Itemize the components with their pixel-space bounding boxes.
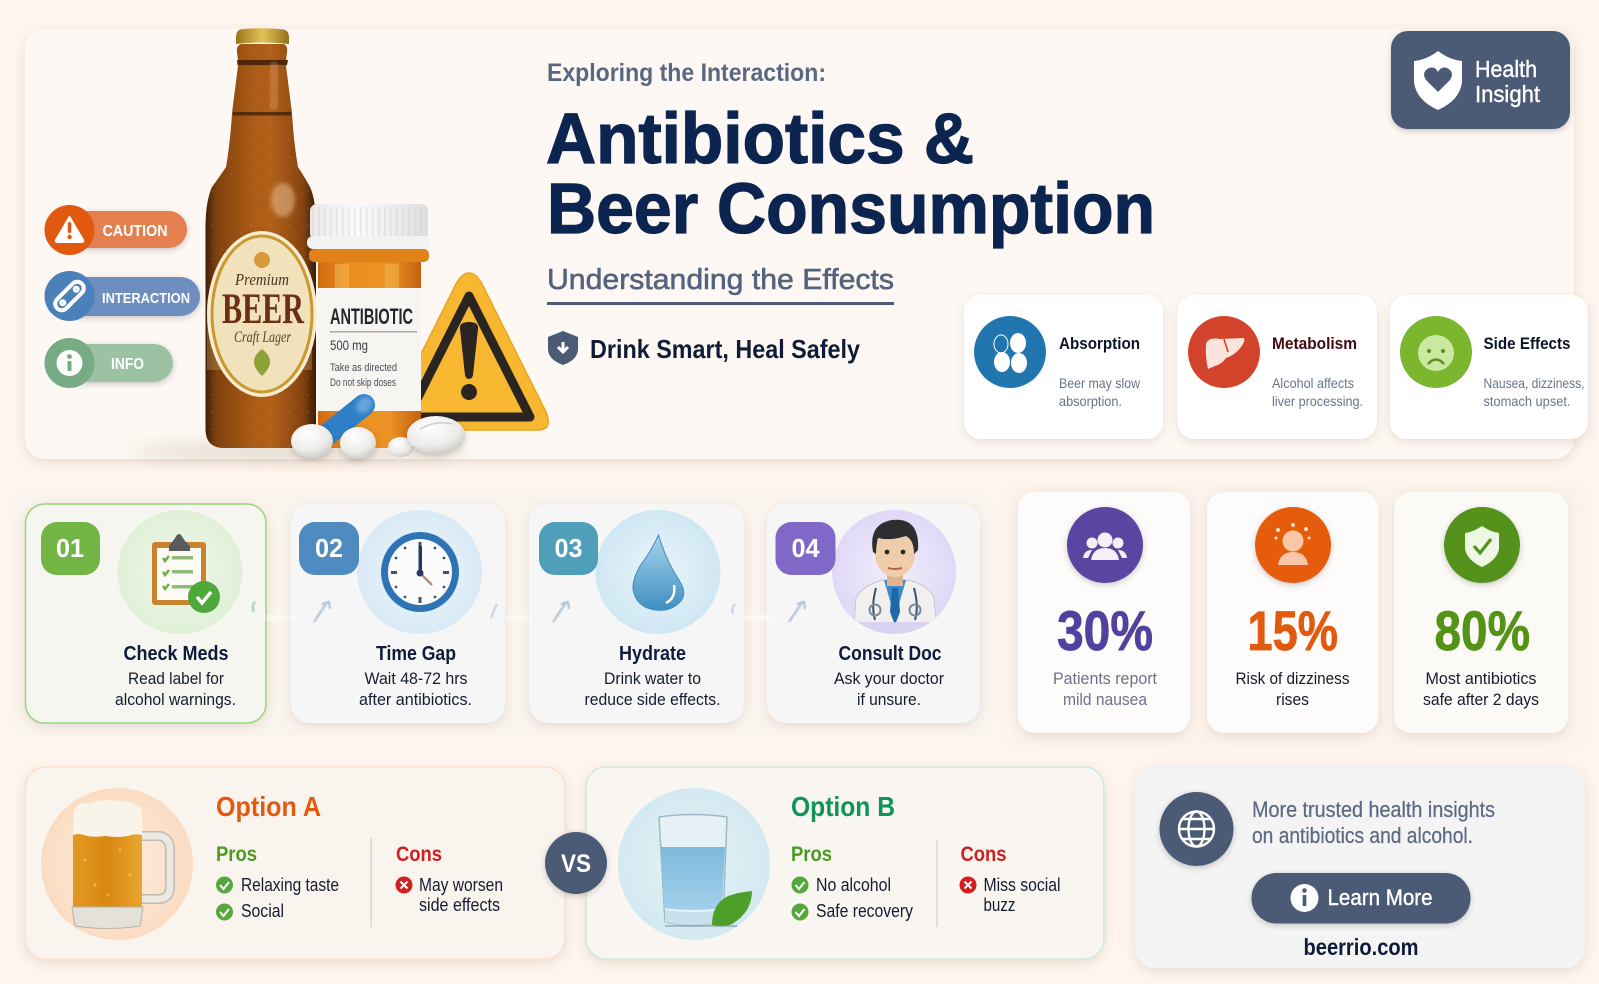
cons: Miss social <box>984 875 1060 895</box>
stat: 80%: Most antibiotics <box>1426 669 1536 688</box>
tag: interaction: INTERACTION <box>102 290 190 307</box>
icon: globe <box>1160 792 1234 866</box>
step number <box>776 522 836 575</box>
antibiotic bottle: Take as directed <box>330 362 397 374</box>
stat: 30%: 30% <box>1057 599 1153 662</box>
pros <box>791 843 913 921</box>
step 4: consult doc: if unsure. <box>857 690 921 709</box>
antibiotic bottle: Do not skip doses <box>330 377 396 389</box>
title <box>546 100 1155 249</box>
tag: info <box>44 338 173 388</box>
stat: 80% <box>1394 492 1568 733</box>
step 1: check meds: alcohol warnings. <box>115 690 236 709</box>
cons: side effects <box>419 895 500 915</box>
button: learn more: Learn More <box>1328 885 1432 910</box>
card: metabolism <box>1178 295 1377 439</box>
panel: option b: Option B <box>791 791 895 822</box>
icon: water glass <box>659 814 752 927</box>
badge: health insight: Insight <box>1475 81 1541 107</box>
panel: stats <box>1004 482 1590 750</box>
beer bottle: Premium <box>234 270 289 289</box>
step 2: time gap: after antibiotics. <box>359 690 472 709</box>
heading: understanding the effects: Understanding the Effects <box>547 264 894 296</box>
card: absorption: Absorption <box>1059 334 1140 353</box>
stat: 15%: 15% <box>1248 599 1338 662</box>
cons: Cons <box>396 843 442 866</box>
antibiotic bottle <box>307 204 431 448</box>
beer bottle: BEER <box>222 286 305 333</box>
step 1: check meds: Check Meds <box>124 643 228 665</box>
step 3: hydrate: Drink water to <box>604 669 701 688</box>
panel: option a <box>26 767 565 959</box>
card: side effects: stomach upset. <box>1484 393 1570 409</box>
panel: steps <box>11 492 994 737</box>
card: absorption: Beer may slow <box>1059 375 1141 391</box>
tag: caution <box>44 205 187 255</box>
card: metabolism: Metabolism <box>1272 334 1357 353</box>
cons <box>396 843 503 915</box>
panel: option b <box>586 767 1104 959</box>
step number: 03 <box>554 533 582 563</box>
step 1: check meds <box>26 504 266 723</box>
badge: health insight <box>1391 31 1570 129</box>
cons: buzz <box>984 895 1016 915</box>
step 2: time gap: Time Gap <box>376 643 456 665</box>
step 1: check meds: Read label for <box>128 669 224 688</box>
stat: 30%: mild nausea <box>1063 690 1147 709</box>
stat: 15%: Risk of dizziness <box>1236 669 1350 688</box>
stat: 30% <box>1018 492 1190 733</box>
stat: 80%: 80% <box>1434 599 1530 662</box>
icon: warning triangle <box>390 273 548 430</box>
step number <box>539 522 598 575</box>
step number <box>299 522 359 575</box>
card: metabolism: liver processing. <box>1272 393 1363 409</box>
step 3: hydrate: Hydrate <box>619 643 686 665</box>
stat: 15%: rises <box>1276 690 1309 709</box>
antibiotic bottle: ANTIBIOTIC <box>330 304 413 329</box>
pros: Pros <box>216 843 257 866</box>
step 4: consult doc <box>767 504 980 723</box>
subtitle: exploring: Exploring the Interaction: <box>547 59 826 87</box>
pros: Safe recovery <box>816 901 913 921</box>
step number: 02 <box>315 533 343 563</box>
panel: hero <box>25 28 1588 459</box>
card: side effects <box>1390 295 1588 439</box>
stat: 30%: Patients report <box>1053 669 1157 688</box>
tag: info: INFO <box>111 356 144 373</box>
panel: call to action: More trusted health insights <box>1252 797 1495 822</box>
pros: No alcohol <box>816 875 891 895</box>
arrows between steps <box>253 602 805 622</box>
step 4: consult doc: Ask your doctor <box>834 669 944 688</box>
card: absorption: absorption. <box>1059 393 1122 409</box>
tag: interaction <box>44 271 200 321</box>
card: metabolism: Alcohol affects <box>1272 375 1354 391</box>
tagline: Drink Smart, Heal Safely <box>590 334 860 364</box>
pros: Pros <box>791 843 832 866</box>
pros: Social <box>241 901 284 921</box>
title: Beer Consumption <box>547 170 1155 249</box>
vs badge <box>545 832 607 894</box>
cons <box>960 843 1060 915</box>
step 3: hydrate <box>529 504 744 723</box>
tag: caution: CAUTION <box>102 223 168 240</box>
title: Antibiotics & <box>546 100 974 179</box>
step number: 01 <box>56 533 84 563</box>
step 3: hydrate: reduce side effects. <box>584 690 720 709</box>
icon: beer mug <box>72 800 170 928</box>
connector bands between steps <box>266 615 770 621</box>
step 2: time gap: Wait 48-72 hrs <box>364 669 468 688</box>
card: side effects: Nausea, dizziness, <box>1484 375 1584 391</box>
pros <box>216 843 339 921</box>
step number: 04 <box>792 533 820 563</box>
pills <box>291 394 465 459</box>
cons: May worsen <box>419 875 503 895</box>
stat: 80%: safe after 2 days <box>1423 690 1539 709</box>
pros: Relaxing taste <box>241 875 339 895</box>
panel: call to action: on antibiotics and alcohol. <box>1252 823 1473 848</box>
cons: Cons <box>960 843 1006 866</box>
step number <box>41 522 100 575</box>
badge: health insight: Health <box>1475 56 1537 82</box>
product shadow <box>130 445 470 459</box>
card: side effects: Side Effects <box>1484 334 1570 353</box>
stat: 15% <box>1207 492 1378 733</box>
antibiotic bottle: 500 mg <box>330 337 368 353</box>
panel: option a: Option A <box>216 791 321 822</box>
panel: call to action: beerrio.com <box>1304 934 1418 960</box>
button: learn more <box>1252 873 1470 924</box>
beer bottle <box>206 28 317 448</box>
card: absorption <box>964 295 1163 439</box>
step 4: consult doc: Consult Doc <box>838 643 942 665</box>
panel: call to action <box>1135 766 1585 968</box>
beer bottle: Craft Lager <box>234 329 292 346</box>
step 2: time gap <box>291 504 505 723</box>
vs badge: VS <box>561 850 591 878</box>
